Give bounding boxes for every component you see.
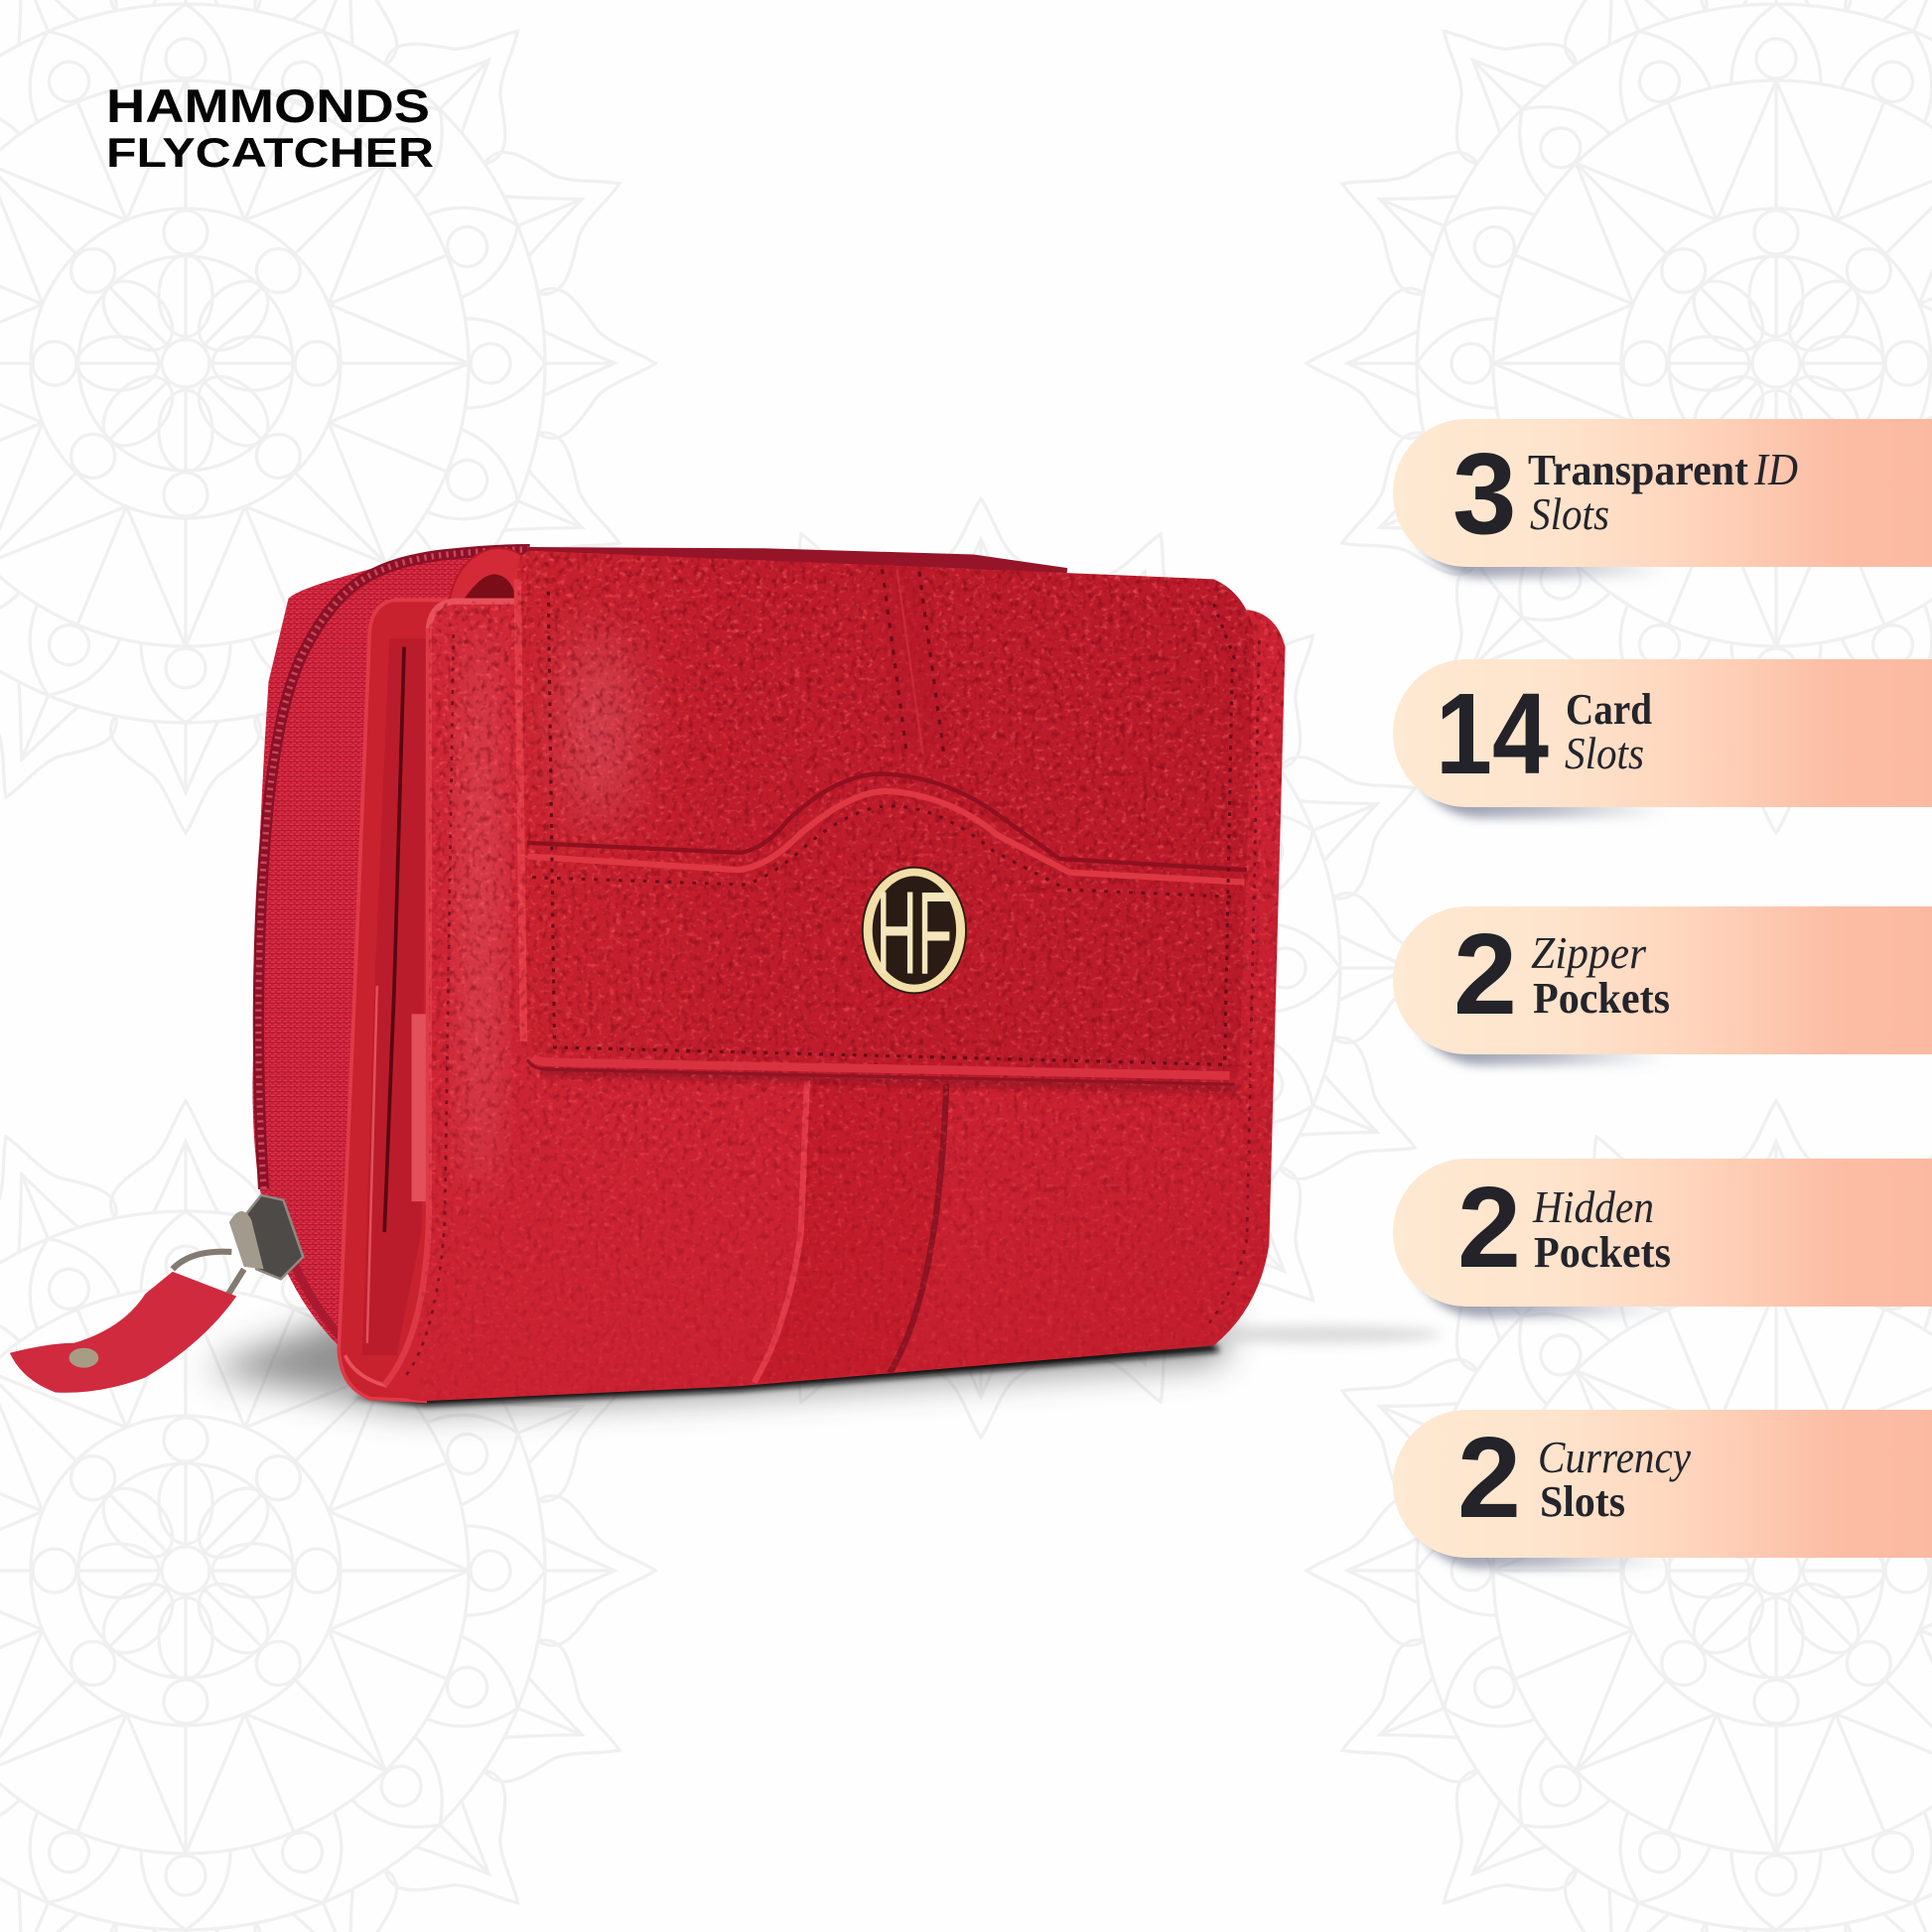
metal HF emblem: HF <box>876 867 952 999</box>
feature pill: 3 Transparent ID Slots: Transparent <box>1528 446 1748 494</box>
brand logo: FLYCATCHER <box>106 129 434 176</box>
flap edge stitching <box>548 592 1237 1064</box>
zipper teeth <box>258 550 1067 1348</box>
flap upper vertical band <box>873 564 949 755</box>
brand logo <box>106 79 434 176</box>
feature pill: 3 Transparent ID Slots <box>1393 419 1932 578</box>
feature pill: 2 Zipper Pockets: 2 <box>1453 909 1517 1038</box>
flap curl behind <box>450 548 542 1059</box>
curl front strip <box>515 579 542 1059</box>
feature pill: 3 Transparent ID Slots: ID <box>1753 444 1798 494</box>
feature pill: 14 Card Slots <box>1393 659 1932 818</box>
feature pill: 14 Card Slots: 14 <box>1436 669 1549 798</box>
zipper pull <box>10 1195 303 1393</box>
flap lower lip <box>532 1057 1230 1075</box>
feature pill: 2 Hidden Pockets: Hidden <box>1532 1181 1654 1232</box>
front panel light <box>459 628 502 1195</box>
metal HF emblem <box>863 867 966 999</box>
wallet ground shadow <box>204 1307 1442 1411</box>
feature pill: 3 Transparent ID Slots: 3 <box>1452 429 1517 558</box>
zip slider <box>246 1195 303 1279</box>
zip-around fabric side <box>252 548 1059 1358</box>
rivet <box>69 1348 98 1368</box>
gap under flap curl <box>464 574 517 604</box>
feature pill: 14 Card Slots: Card <box>1566 685 1652 734</box>
feature pill: 2 Currency Slots: 2 <box>1457 1413 1521 1542</box>
feature pill: 14 Card Slots: Slots <box>1565 728 1644 778</box>
feature pill: 2 Currency Slots <box>1393 1410 1932 1569</box>
feature pill: 2 Currency Slots: Slots <box>1540 1477 1625 1526</box>
feature pill: 2 Hidden Pockets <box>1393 1159 1932 1317</box>
feature pill: 2 Zipper Pockets: Zipper <box>1531 927 1647 978</box>
brand logo: HAMMONDS <box>106 79 430 132</box>
product photo: red leather wallet <box>10 542 1442 1411</box>
flap highlight <box>563 628 632 826</box>
lower vertical band <box>755 1082 946 1383</box>
pull ring <box>173 1252 244 1309</box>
leather grain texture <box>419 542 1294 1405</box>
feature pill: 2 Hidden Pockets: 2 <box>1457 1163 1521 1292</box>
feature pill: 2 Zipper Pockets: Pockets <box>1533 974 1670 1023</box>
feature pill: 2 Hidden Pockets: Pockets <box>1534 1228 1671 1277</box>
feature pill: 2 Currency Slots: Currency <box>1538 1432 1692 1482</box>
flap <box>517 551 1254 1082</box>
flap arched seam <box>527 773 1247 897</box>
feature pill: 3 Transparent ID Slots: Slots <box>1530 488 1609 539</box>
leather tab <box>10 1272 236 1393</box>
front panel <box>384 602 1285 1401</box>
shadow under flap <box>542 1072 1237 1089</box>
feature pill: 2 Zipper Pockets <box>1393 906 1932 1065</box>
flap left edge highlight <box>517 579 523 1041</box>
front stitching <box>404 634 1259 1378</box>
inner pocket layers <box>339 600 446 1401</box>
